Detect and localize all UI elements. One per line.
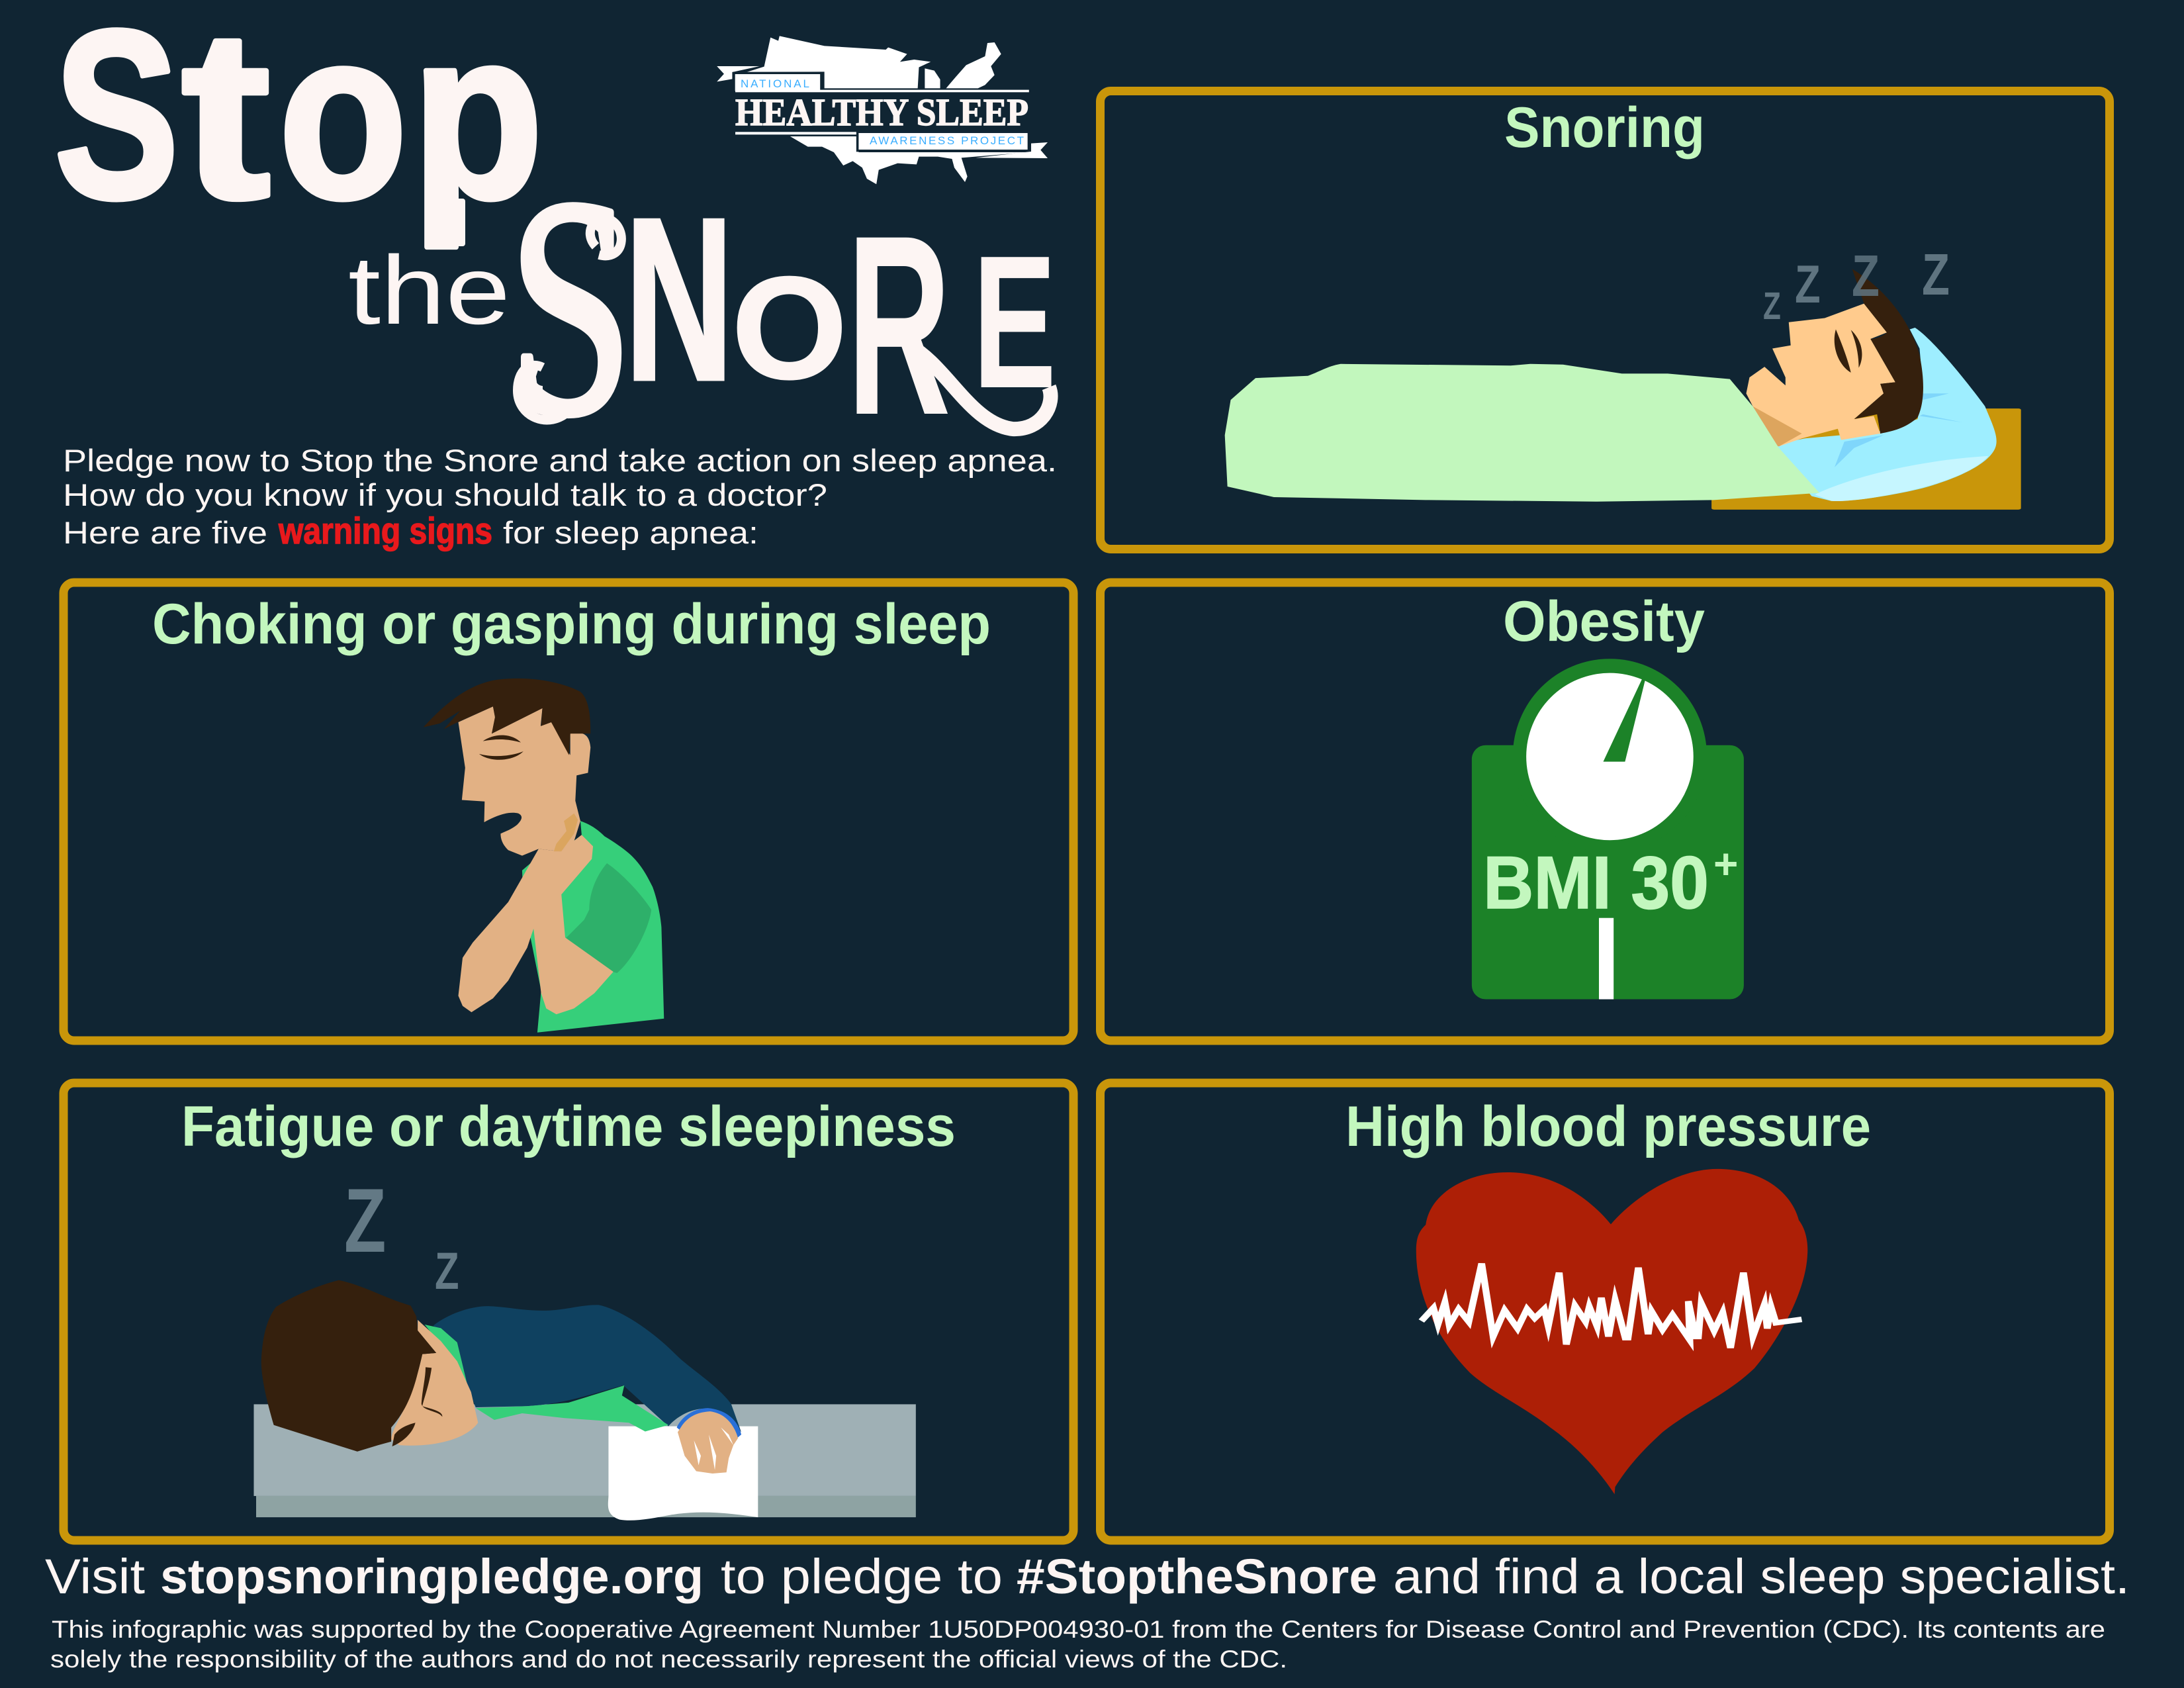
panel: high blood pressure: [1100, 1083, 2110, 1540]
illustration: BMI scale: [1472, 659, 1744, 1000]
illustration: heart with ECG line: [1416, 1169, 1807, 1494]
label: BMI 30: BMI 30: [1483, 841, 1709, 924]
illustration: man choking: [424, 679, 664, 1033]
heading: choking: Choking or gasping during sleep: [152, 592, 991, 656]
icon: sleep Z letters: Z: [1795, 255, 1821, 314]
intro text block: Here are five: [63, 515, 267, 550]
title: Stop the Snore: N: [625, 169, 733, 429]
panel: obesity: [1100, 583, 2110, 1041]
title: Stop the Snore: O: [732, 247, 847, 409]
call to action line: and find a local sleep specialist.: [1393, 1549, 2130, 1604]
call to action line: stopsnoringpledge.org: [160, 1549, 704, 1604]
heading: obesity: Obesity: [1503, 590, 1705, 653]
panel: snoring: [1100, 91, 2110, 549]
panel: fatigue or daytime sleepiness: [64, 1083, 1073, 1540]
icon: sleep Z letters: Z: [1852, 244, 1880, 308]
label: plus sign: +: [1713, 840, 1738, 888]
call to action line: to pledge to: [721, 1549, 1003, 1604]
icon: sleep Z letters: Z: [435, 1241, 459, 1300]
heading: high blood pressure: High blood pressure: [1345, 1095, 1871, 1158]
title: Stop the Snore: E: [973, 217, 1056, 428]
heading: snoring: Snoring: [1504, 96, 1705, 160]
disclaimer footnote: [50, 1616, 2105, 1673]
logo: National Healthy Sleep Awareness Project: AWARENESS PROJECT: [870, 134, 1024, 147]
call to action line: #StoptheSnore: [1017, 1549, 1377, 1604]
title: Stop the Snore: [54, 0, 1056, 479]
title: Stop the Snore: the: [348, 236, 510, 345]
icon: sleep Z letters: Z: [1763, 284, 1781, 327]
intro text block: Pledge now to Stop the Snore and take action on sleep apnea.: [63, 443, 1057, 478]
title: Stop the Snore: S: [508, 134, 633, 479]
logo: National Healthy Sleep Awareness Project: [717, 36, 1048, 184]
heading: fatigue: Fatigue or daytime sleepiness: [181, 1095, 956, 1158]
illustration: man snoring in bed: [1225, 269, 2021, 510]
intro text block: warning signs: [278, 510, 492, 551]
disclaimer footnote: solely the responsibility of the authors and do not necessarily represent the official views of the CDC.: [50, 1646, 1287, 1673]
icon: sleep Z letters: [1763, 242, 1950, 327]
icon: sleep Z letters: Z: [1922, 242, 1950, 307]
call to action line: Visit: [45, 1549, 145, 1604]
logo: National Healthy Sleep Awareness Project: HEALTHY SLEEP: [735, 91, 1028, 134]
illustration: person asleep at desk: [253, 1280, 916, 1521]
icon: sleep Z letters: [344, 1170, 459, 1300]
intro text block: How do you know if you should talk to a doctor?: [63, 477, 827, 512]
title: Stop the Snore: R: [847, 183, 951, 469]
disclaimer footnote: This infographic was supported by the Cooperative Agreement Number 1U50DP004930-01 from the Centers for Disease Control and Prevention (CDC). Its contents are: [52, 1616, 2105, 1643]
call to action line: [45, 1549, 2130, 1604]
panel: choking or gasping: [64, 583, 1073, 1041]
intro text block: [63, 443, 1057, 551]
icon: sleep Z letters: Z: [344, 1170, 386, 1271]
logo: National Healthy Sleep Awareness Project: NATIONAL: [741, 77, 809, 90]
intro text block: for sleep apnea:: [503, 515, 758, 550]
